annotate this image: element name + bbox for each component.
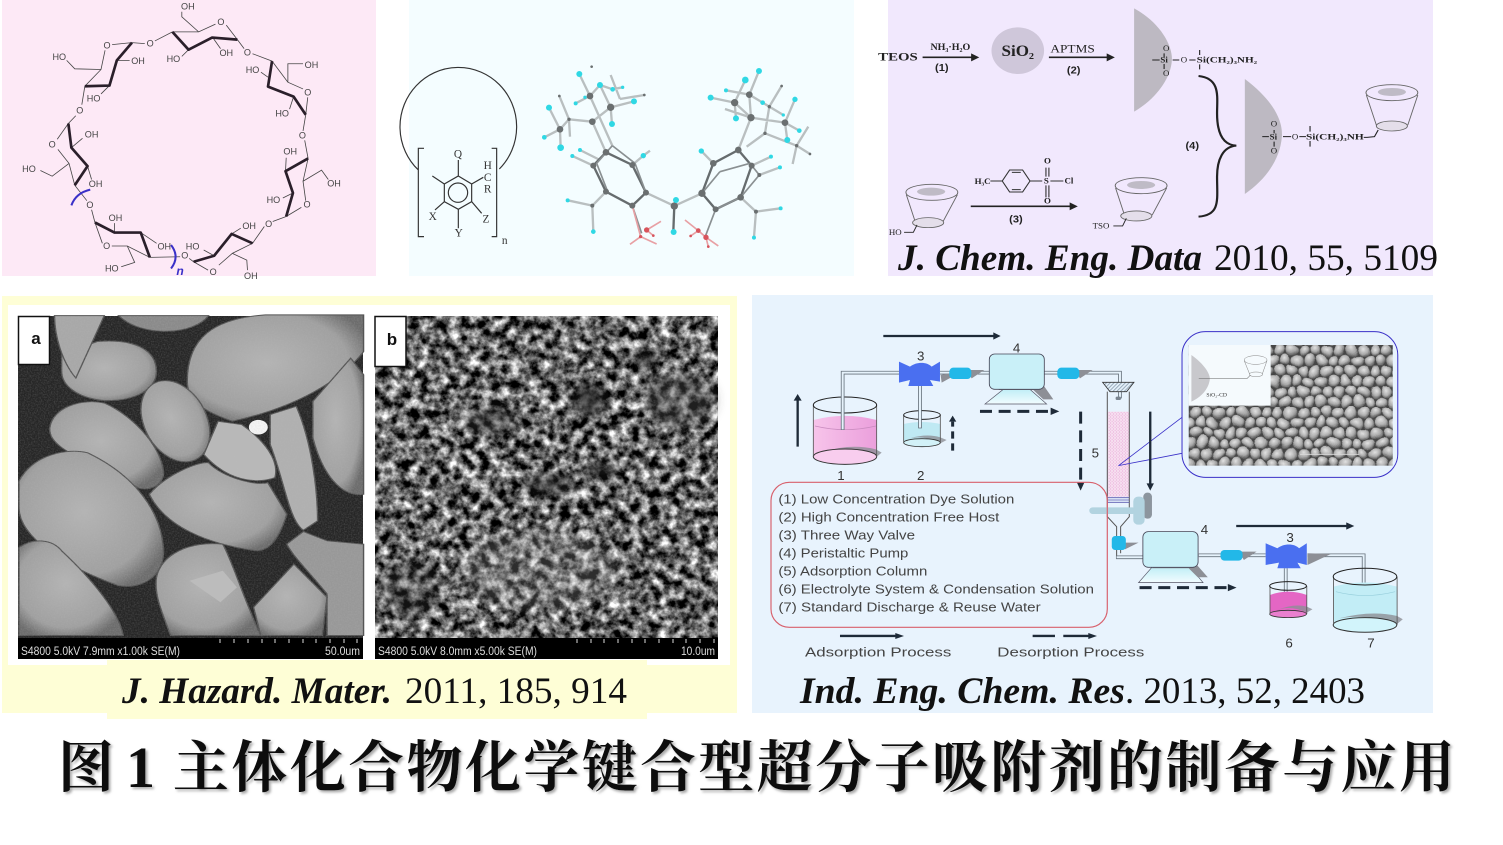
reaction scheme: SiO₂ bbox=[1002, 43, 1034, 60]
reaction scheme bbox=[878, 8, 1418, 237]
reaction scheme: (2) bbox=[1067, 65, 1081, 76]
right half of flow system bbox=[1112, 332, 1406, 650]
molecular ring diagram: HO bbox=[167, 54, 180, 64]
molecular ring diagram: O bbox=[103, 241, 110, 251]
title: 1 bbox=[126, 735, 155, 800]
reaction scheme: Si(CH₂)₃NH₂ bbox=[1197, 55, 1258, 65]
column and beaker numbers: 5 bbox=[1092, 446, 1099, 461]
label a bbox=[18, 316, 50, 364]
citation: J. Hazard. Mater.: 2011, 185, 914 bbox=[405, 671, 627, 712]
reaction scheme: Si bbox=[1160, 55, 1168, 65]
legend box: (1) Low Concentration Dye Solution bbox=[778, 493, 1014, 507]
calixarene general formula: X bbox=[429, 211, 437, 223]
adsorption column 5 bbox=[1103, 382, 1134, 557]
reaction scheme: (1) bbox=[935, 62, 949, 74]
calixarene general formula: C bbox=[484, 172, 491, 184]
legend box: (4) Peristaltic Pump bbox=[778, 546, 908, 560]
flow arrows bbox=[794, 332, 1084, 491]
tosyl chloride reagent bbox=[975, 156, 1074, 206]
molecular ring diagram: O bbox=[265, 219, 272, 229]
outlet numbers: 4 bbox=[1201, 522, 1209, 537]
calixarene general formula: Q bbox=[454, 149, 462, 161]
pump 4 outlet bbox=[1139, 532, 1208, 583]
pipes bbox=[843, 373, 1120, 430]
outlet pipes bbox=[1199, 555, 1364, 593]
citation: Ind. Eng. Chem. Res.: Ind. Eng. Chem. Res bbox=[799, 671, 1125, 712]
column solid arrow bbox=[1147, 412, 1154, 491]
citation: J. Chem. Eng. Data bbox=[897, 238, 1438, 279]
molecular ring diagram: HO bbox=[275, 108, 289, 118]
molecular ring diagram: O bbox=[244, 48, 251, 58]
electrolyte junction bbox=[1089, 493, 1152, 525]
cup: product cyclodextrin bbox=[1366, 85, 1418, 131]
molecular ring diagram: OH bbox=[242, 221, 256, 231]
citation: J. Chem. Eng. Data: 2010, 55, 5109 bbox=[1214, 238, 1438, 279]
label b bbox=[375, 316, 406, 366]
valve 3 outlet bbox=[1266, 543, 1331, 568]
legend box bbox=[771, 482, 1107, 627]
SEM data bar b: S4800 5.0kV 8.0mm x5.00k SE(M) bbox=[378, 646, 537, 658]
reaction scheme: O bbox=[1181, 55, 1187, 65]
reaction scheme: NH₃·H₂O bbox=[930, 43, 970, 53]
outlet numbers bbox=[1201, 522, 1375, 650]
SEM data bar a bbox=[18, 638, 363, 659]
legend box: (2) High Concentration Free Host bbox=[778, 511, 1000, 525]
title: 图 bbox=[58, 738, 114, 800]
tosyl chloride reagent: O bbox=[1044, 156, 1051, 165]
calixarene general formula: Z bbox=[483, 213, 490, 225]
legend box: (3) Three Way Valve bbox=[778, 529, 915, 543]
panel: SEM images bbox=[2, 296, 737, 719]
reaction scheme: O bbox=[1271, 146, 1277, 155]
beaker 1: dye solution bbox=[813, 397, 882, 464]
citation: J. Hazard. Mater.: J. Hazard. Mater. bbox=[121, 671, 392, 712]
molecular ring diagram: O bbox=[76, 105, 83, 115]
key: desorption process bbox=[997, 633, 1145, 660]
key: adsorption process bbox=[805, 633, 952, 660]
label a: a bbox=[31, 329, 41, 348]
tosyl chloride reagent: S bbox=[1044, 176, 1049, 186]
reaction scheme: TEOS bbox=[878, 50, 918, 63]
beaker 6: electrolyte bbox=[1270, 582, 1312, 618]
citation: J. Hazard. Mater. bbox=[121, 671, 627, 712]
panel: silica-cyclodextrin synthesis scheme bbox=[878, 0, 1438, 279]
molecular ring diagram: n bbox=[176, 264, 184, 278]
calixarene general formula: H bbox=[484, 160, 492, 172]
molecular ring diagram: HO bbox=[105, 264, 119, 273]
SEM data bar a: 50.0um bbox=[325, 646, 360, 658]
outlet connector bbox=[1112, 536, 1139, 550]
inset: SiO2-CD schematic: SiO₂-CD bbox=[1206, 392, 1227, 398]
column and beaker numbers: 2 bbox=[917, 468, 924, 483]
reaction scheme: O bbox=[1163, 68, 1169, 78]
molecular ring diagram: OH bbox=[158, 241, 171, 251]
citation: Ind. Eng. Chem. Res. bbox=[799, 671, 1365, 712]
beaker 2: free host bbox=[904, 411, 947, 447]
panel: calixarene structure bbox=[400, 0, 854, 276]
column and beaker numbers: 4 bbox=[1013, 341, 1021, 356]
molecular ring diagram: OH bbox=[283, 147, 297, 157]
outlet numbers: 7 bbox=[1367, 635, 1375, 650]
reaction scheme: O bbox=[1292, 132, 1298, 141]
panel: cyclodextrin ring structure bbox=[2, 0, 376, 281]
molecular ring diagram: OH bbox=[181, 2, 195, 12]
molecular ring diagram: HO bbox=[186, 241, 199, 251]
molecular ring diagram: O bbox=[104, 41, 111, 51]
outlet flow arrows bbox=[1140, 522, 1354, 591]
molecular ring diagram: OH bbox=[85, 130, 98, 140]
beaker 7: reuse water bbox=[1333, 568, 1403, 632]
molecular ring diagram: OH bbox=[219, 48, 233, 58]
molecular ring diagram: O bbox=[86, 200, 93, 210]
reaction scheme: Si bbox=[1270, 132, 1278, 141]
SEM data bar b: 10.0um bbox=[681, 646, 715, 658]
molecular ring diagram: OH bbox=[305, 60, 318, 70]
molecular ring diagram: HO bbox=[22, 164, 36, 174]
molecular ring diagram: HO bbox=[52, 52, 66, 62]
molecular ring diagram: OH bbox=[327, 179, 341, 189]
tosyl chloride reagent: Cl bbox=[1064, 176, 1074, 186]
SEM image b: porous surface bbox=[375, 316, 718, 659]
molecular ring diagram: O bbox=[304, 200, 311, 210]
reaction scheme: O bbox=[1163, 43, 1169, 53]
left half of flow system bbox=[771, 332, 1152, 660]
outlet numbers: 3 bbox=[1286, 530, 1294, 545]
legend box: (5) Adsorption Column bbox=[778, 564, 927, 578]
cup: starting cyclodextrin bbox=[904, 184, 958, 232]
reaction scheme: TSO bbox=[1093, 221, 1109, 231]
pump 4 bbox=[985, 354, 1053, 404]
molecular ring diagram: HO bbox=[267, 195, 280, 205]
outlet tube connector bbox=[1220, 550, 1257, 561]
tosyl chloride reagent: H₃C bbox=[975, 176, 991, 186]
calixarene general formula: Y bbox=[455, 228, 463, 240]
molecular ring diagram: O bbox=[304, 87, 311, 97]
inset: SiO2-CD schematic bbox=[1189, 345, 1271, 406]
reaction scheme: APTMS bbox=[1050, 42, 1095, 55]
molecular ring diagram: HO bbox=[87, 93, 100, 103]
SEM data bar a: S4800 5.0kV 7.9mm x1.00k SE(M) bbox=[21, 646, 180, 658]
molecular ring diagram bbox=[22, 2, 341, 281]
tube connector bbox=[1057, 368, 1093, 379]
citation: J. Chem. Eng. Data: J. Chem. Eng. Data bbox=[897, 238, 1202, 279]
molecular ring diagram: OH bbox=[131, 56, 145, 66]
legend box: (7) Standard Discharge & Reuse Water bbox=[778, 600, 1041, 614]
key: adsorption process: Adsorption Process bbox=[805, 645, 952, 660]
molecular ring diagram: O bbox=[147, 39, 154, 49]
title: 主体化合物化学键合型超分子吸附剂的制备与应用 bbox=[173, 738, 1455, 800]
molecular ring diagram: OH bbox=[244, 271, 258, 281]
callout: silica particle SEM bbox=[1175, 332, 1406, 479]
key: desorption process: Desorption Process bbox=[997, 645, 1145, 660]
SEM data bar b bbox=[378, 639, 715, 658]
reaction scheme: HO bbox=[889, 227, 902, 237]
callout pointer lines bbox=[1118, 417, 1182, 466]
molecular ring diagram: O bbox=[299, 130, 306, 140]
molecular ring diagram: O bbox=[217, 17, 224, 27]
column and beaker numbers: 1 bbox=[837, 468, 845, 483]
reaction scheme: Si(CH₂)₃NH bbox=[1306, 132, 1364, 141]
label b: b bbox=[387, 330, 397, 349]
tosyl chloride reagent: O bbox=[1044, 196, 1051, 206]
molecular ring diagram: OH bbox=[109, 213, 122, 223]
molecular ring diagram: O bbox=[181, 250, 188, 260]
calixarene general formula bbox=[400, 67, 517, 247]
calixarene general formula: R bbox=[484, 183, 492, 195]
citation: Ind. Eng. Chem. Res.: . 2013, 52, 2403 bbox=[1125, 671, 1365, 712]
calixarene general formula: n bbox=[502, 235, 508, 247]
SEM image a: particles bbox=[18, 315, 364, 659]
molecular ring diagram: HO bbox=[246, 65, 259, 75]
molecular ring diagram: OH bbox=[89, 179, 102, 189]
legend box: (6) Electrolyte System & Condensation Solution bbox=[778, 582, 1094, 596]
reaction scheme: O bbox=[1271, 119, 1277, 129]
cup: tosylated cyclodextrin bbox=[1113, 178, 1167, 226]
tube connector bbox=[949, 368, 984, 379]
panel: adsorption process flow diagram bbox=[752, 295, 1433, 713]
reaction scheme: (4) bbox=[1185, 140, 1199, 152]
molecular ring diagram: O bbox=[210, 267, 217, 277]
3D ball-and-stick molecule bbox=[542, 65, 811, 248]
valve 3 bbox=[899, 362, 940, 386]
molecular ring diagram: O bbox=[49, 140, 56, 150]
reaction scheme: (3) bbox=[1009, 214, 1023, 225]
column and beaker numbers bbox=[837, 341, 1099, 483]
outlet numbers: 6 bbox=[1285, 635, 1293, 650]
column and beaker numbers: 3 bbox=[917, 349, 924, 364]
